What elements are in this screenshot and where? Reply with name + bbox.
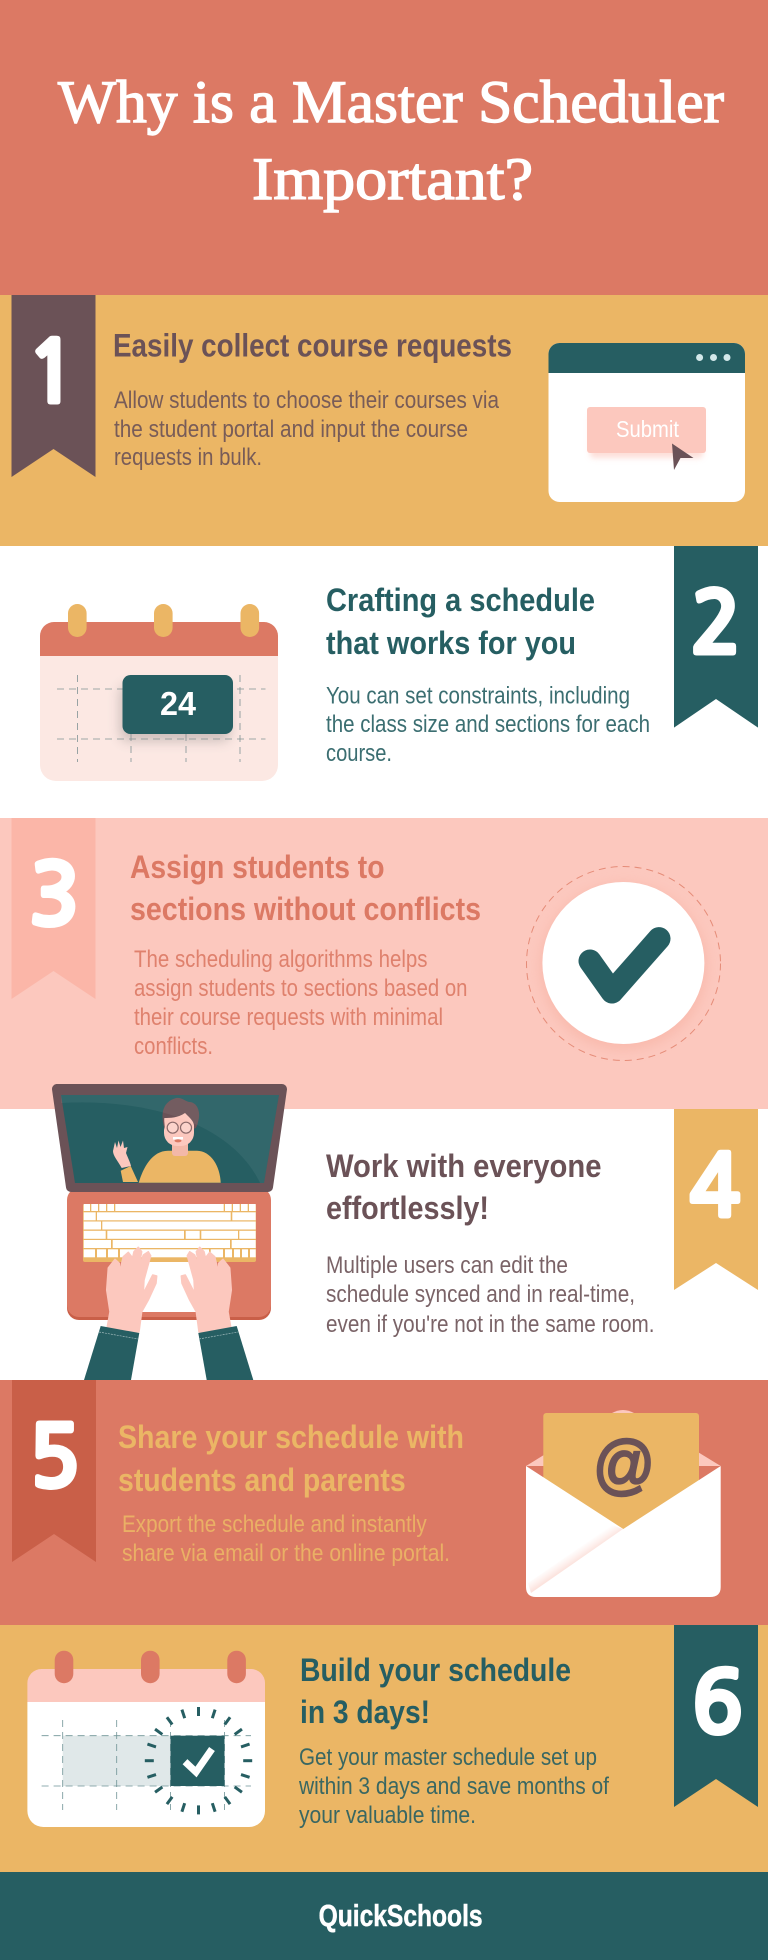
ribbon: number 3 — [12, 818, 96, 999]
icon: envelope with email letter — [526, 1410, 721, 1597]
icon: envelope with email letter: @ — [593, 1427, 655, 1501]
heading: step 4 — [326, 1148, 602, 1226]
text block: step 1 — [114, 387, 500, 471]
heading: step 5: students and parents — [118, 1462, 406, 1498]
heading: step 2 — [326, 582, 595, 661]
ribbon: number 6: 6 — [692, 1662, 743, 1746]
right hand — [181, 1247, 231, 1332]
heading: step 3 — [130, 849, 481, 927]
panel: step 5 share your schedule — [0, 1380, 768, 1625]
text block: step 3: their course requests with minimal — [134, 1004, 443, 1031]
icon: calendar with date 24: 24 — [160, 685, 197, 722]
panel: step 6 build in 3 days — [0, 1625, 768, 1873]
person on video call — [113, 1098, 221, 1183]
ribbon: number 5: 5 — [29, 1416, 80, 1500]
heading: step 1: Easily collect course requests — [113, 328, 512, 364]
text block: step 4 — [326, 1252, 654, 1338]
heading: step 5: Share your schedule with — [118, 1419, 464, 1455]
heading: step 3: Assign students to — [130, 849, 384, 885]
text block: step 6: Get your master schedule set up — [299, 1744, 597, 1771]
title — [58, 69, 724, 212]
ribbon: number 5 — [12, 1380, 96, 1562]
text block: step 6 — [298, 1744, 609, 1829]
text block: step 3: The scheduling algorithms helps — [134, 946, 428, 973]
text block: step 6: your valuable time. — [299, 1802, 476, 1829]
ribbon: number 1 — [12, 295, 96, 477]
ribbon: number 3: 3 — [29, 854, 80, 938]
text block: step 2: the class size and sections for each — [326, 711, 650, 738]
icon: browser window with submit button — [548, 343, 745, 502]
heading: step 5 — [118, 1419, 464, 1498]
heading: step 2: Crafting a schedule — [326, 582, 595, 618]
title: Why is a Master Scheduler — [58, 69, 724, 135]
text block: step 2 — [326, 682, 650, 767]
icon: calendar with date 24 — [40, 604, 278, 781]
text block: step 3: assign students to sections based on — [134, 975, 468, 1002]
text block: step 4: schedule synced and in real-time, — [326, 1281, 635, 1308]
text block: step 5: Export the schedule and instantly — [122, 1511, 427, 1538]
heading: step 6 — [300, 1652, 571, 1730]
text block: step 3 — [134, 946, 468, 1060]
panel: step 3 assign students — [0, 818, 768, 1109]
icon: calendar with checked date — [27, 1651, 265, 1827]
ribbon: number 2: 2 — [690, 582, 742, 666]
heading: step 4: effortlessly! — [326, 1190, 489, 1226]
heading: step 3: sections without conflicts — [130, 891, 481, 927]
illustration: laptop with video call and hands — [57, 1089, 282, 1380]
panel: footer — [0, 1872, 768, 1960]
panel: step 2 crafting a schedule — [0, 546, 768, 818]
panel: step 1 collect course requests — [0, 295, 768, 546]
panel: step 4 work with everyone — [0, 1089, 768, 1380]
text block: step 5: share via email or the online portal. — [122, 1540, 450, 1567]
heading: step 6: in 3 days! — [300, 1694, 430, 1730]
logo text: QuickSchools — [319, 1898, 483, 1933]
ribbon: number 6 — [674, 1625, 758, 1807]
keyboard — [83, 1204, 256, 1262]
sleeves — [84, 1326, 253, 1380]
panel: title header — [0, 0, 768, 295]
text block: step 2: You can set constraints, including — [326, 682, 630, 710]
text block: step 4: Multiple users can edit the — [326, 1252, 568, 1279]
text block: step 2: course. — [326, 740, 392, 767]
icon: browser window with submit button: Submit — [616, 416, 680, 442]
laptop lid and screen — [57, 1089, 282, 1187]
text block: step 5 — [122, 1511, 450, 1567]
text block: step 3: conflicts. — [134, 1033, 213, 1060]
ribbon: number 4: 4 — [689, 1145, 741, 1229]
touchpad — [130, 1262, 208, 1312]
text block: step 1: Allow students to choose their courses via — [114, 387, 500, 414]
icon: check mark in dashed circle — [526, 866, 720, 1060]
ribbon: number 4 — [674, 1109, 758, 1290]
text block: step 1: the student portal and input the course — [114, 416, 468, 443]
text block: step 1: requests in bulk. — [114, 444, 262, 471]
heading: step 6: Build your schedule — [300, 1652, 571, 1688]
heading: step 2: that works for you — [326, 625, 576, 661]
text block: step 6: within 3 days and save months of — [298, 1773, 609, 1800]
ribbon: number 1: 1 — [26, 331, 78, 415]
ribbon: number 2 — [674, 546, 758, 728]
heading: step 4: Work with everyone — [326, 1148, 602, 1184]
title: Important? — [252, 146, 533, 212]
laptop base — [67, 1188, 271, 1320]
left hand — [107, 1247, 157, 1332]
text block: step 4: even if you're not in the same room. — [326, 1311, 654, 1338]
